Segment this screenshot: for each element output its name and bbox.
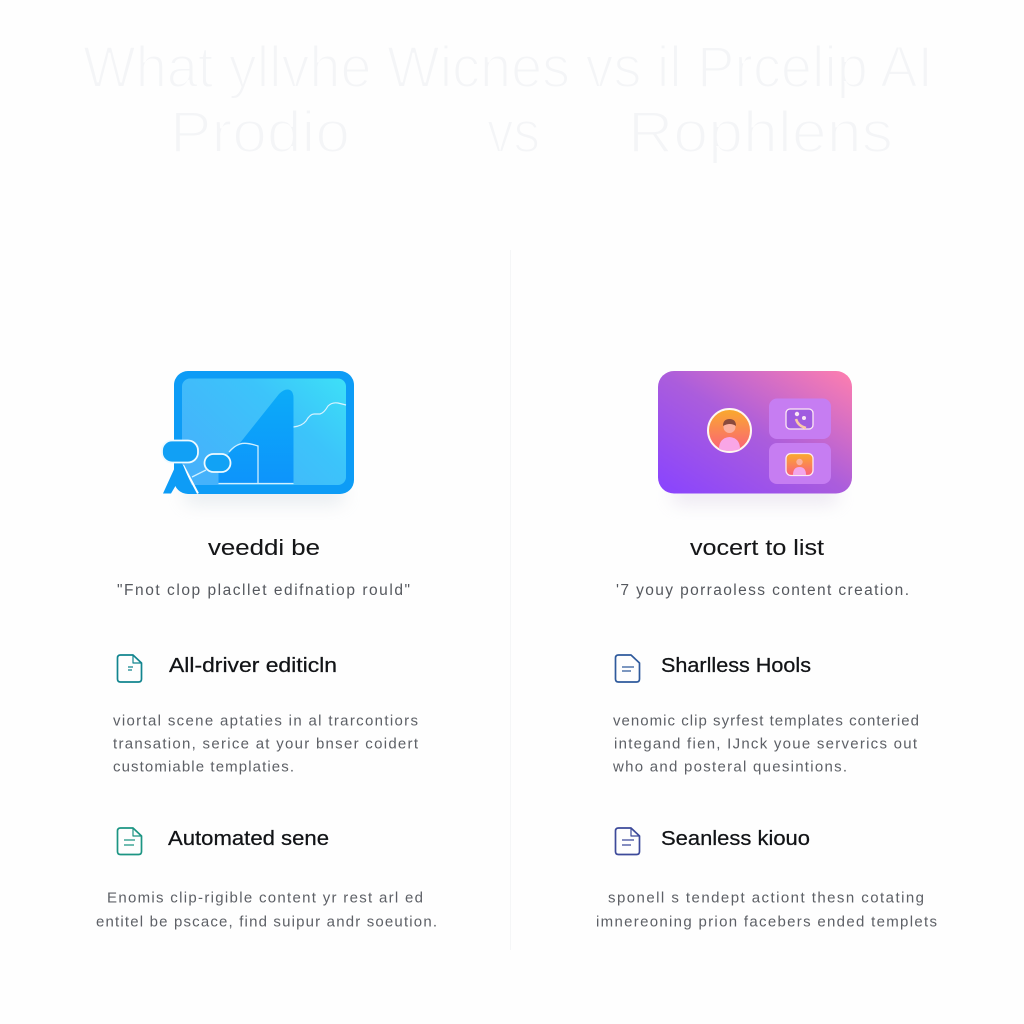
feature: Sharlless Hools: venomic clip syrfest templates conteried [613,712,919,730]
feature: Seanless kiouo: sponell s tendept actiont thesn cotating [608,890,924,906]
feature: All-driver editicln: viortal scene aptaties in al trarcontiors [113,712,418,730]
feature: All-driver editicln: All-driver editicln [169,654,337,677]
feature: Automated sene: Enomis clip-rigible content yr rest arl ed [107,890,423,906]
feature: All-driver editicln: transation, serice at your bnser coidert [113,736,419,752]
title: Prodio [170,100,350,165]
feature: Sharlless Hools [612,654,919,776]
panel: left column [96,371,437,930]
feature: Sharlless Hools: Sharlless Hools [661,654,811,677]
title: Rophlens [628,100,893,165]
panel: right column [596,371,937,930]
feature: Seanless kiouo [596,827,937,930]
feature: Seanless kiouo: Seanless kiouo [661,827,810,850]
avatar: main presenter [708,409,751,452]
icon: indigo document [616,828,640,854]
feature: All-driver editicln [113,654,419,776]
feature: Seanless kiouo: imnereoning prion facebers ended templets [596,914,937,930]
tile: hand and screen [769,398,831,439]
feature: Automated sene [96,827,437,930]
icon: blue video editor screen [162,371,354,504]
heading: veeddi be: veeddi be [208,535,320,560]
subtitle: "Fnot clop placllet edifnatiop rould" [117,582,410,599]
feature: Sharlless Hools: integand fien, IJnck youe serverics out [614,736,918,752]
icon: green document [118,828,142,854]
subtitle: '7 youy porraoless content creation. [616,582,909,599]
heading: vocert to list: vocert to list [690,535,825,560]
feature: Automated sene: entitel be pscace, find suipur andr soeution. [96,914,437,930]
feature: Sharlless Hools: who and posteral quesintions. [612,758,847,776]
icon: teal document [118,655,142,682]
feature: Automated sene: Automated sene [168,827,329,850]
title: What yllvhe Wicnes vs il Prcelip AI [83,35,933,100]
title: vs [487,100,540,165]
tile: participant [769,443,831,484]
title [83,35,933,165]
feature: All-driver editicln: customiable templaties. [113,758,294,776]
icon: purple video call card [658,371,852,504]
icon: navy document [616,655,640,682]
